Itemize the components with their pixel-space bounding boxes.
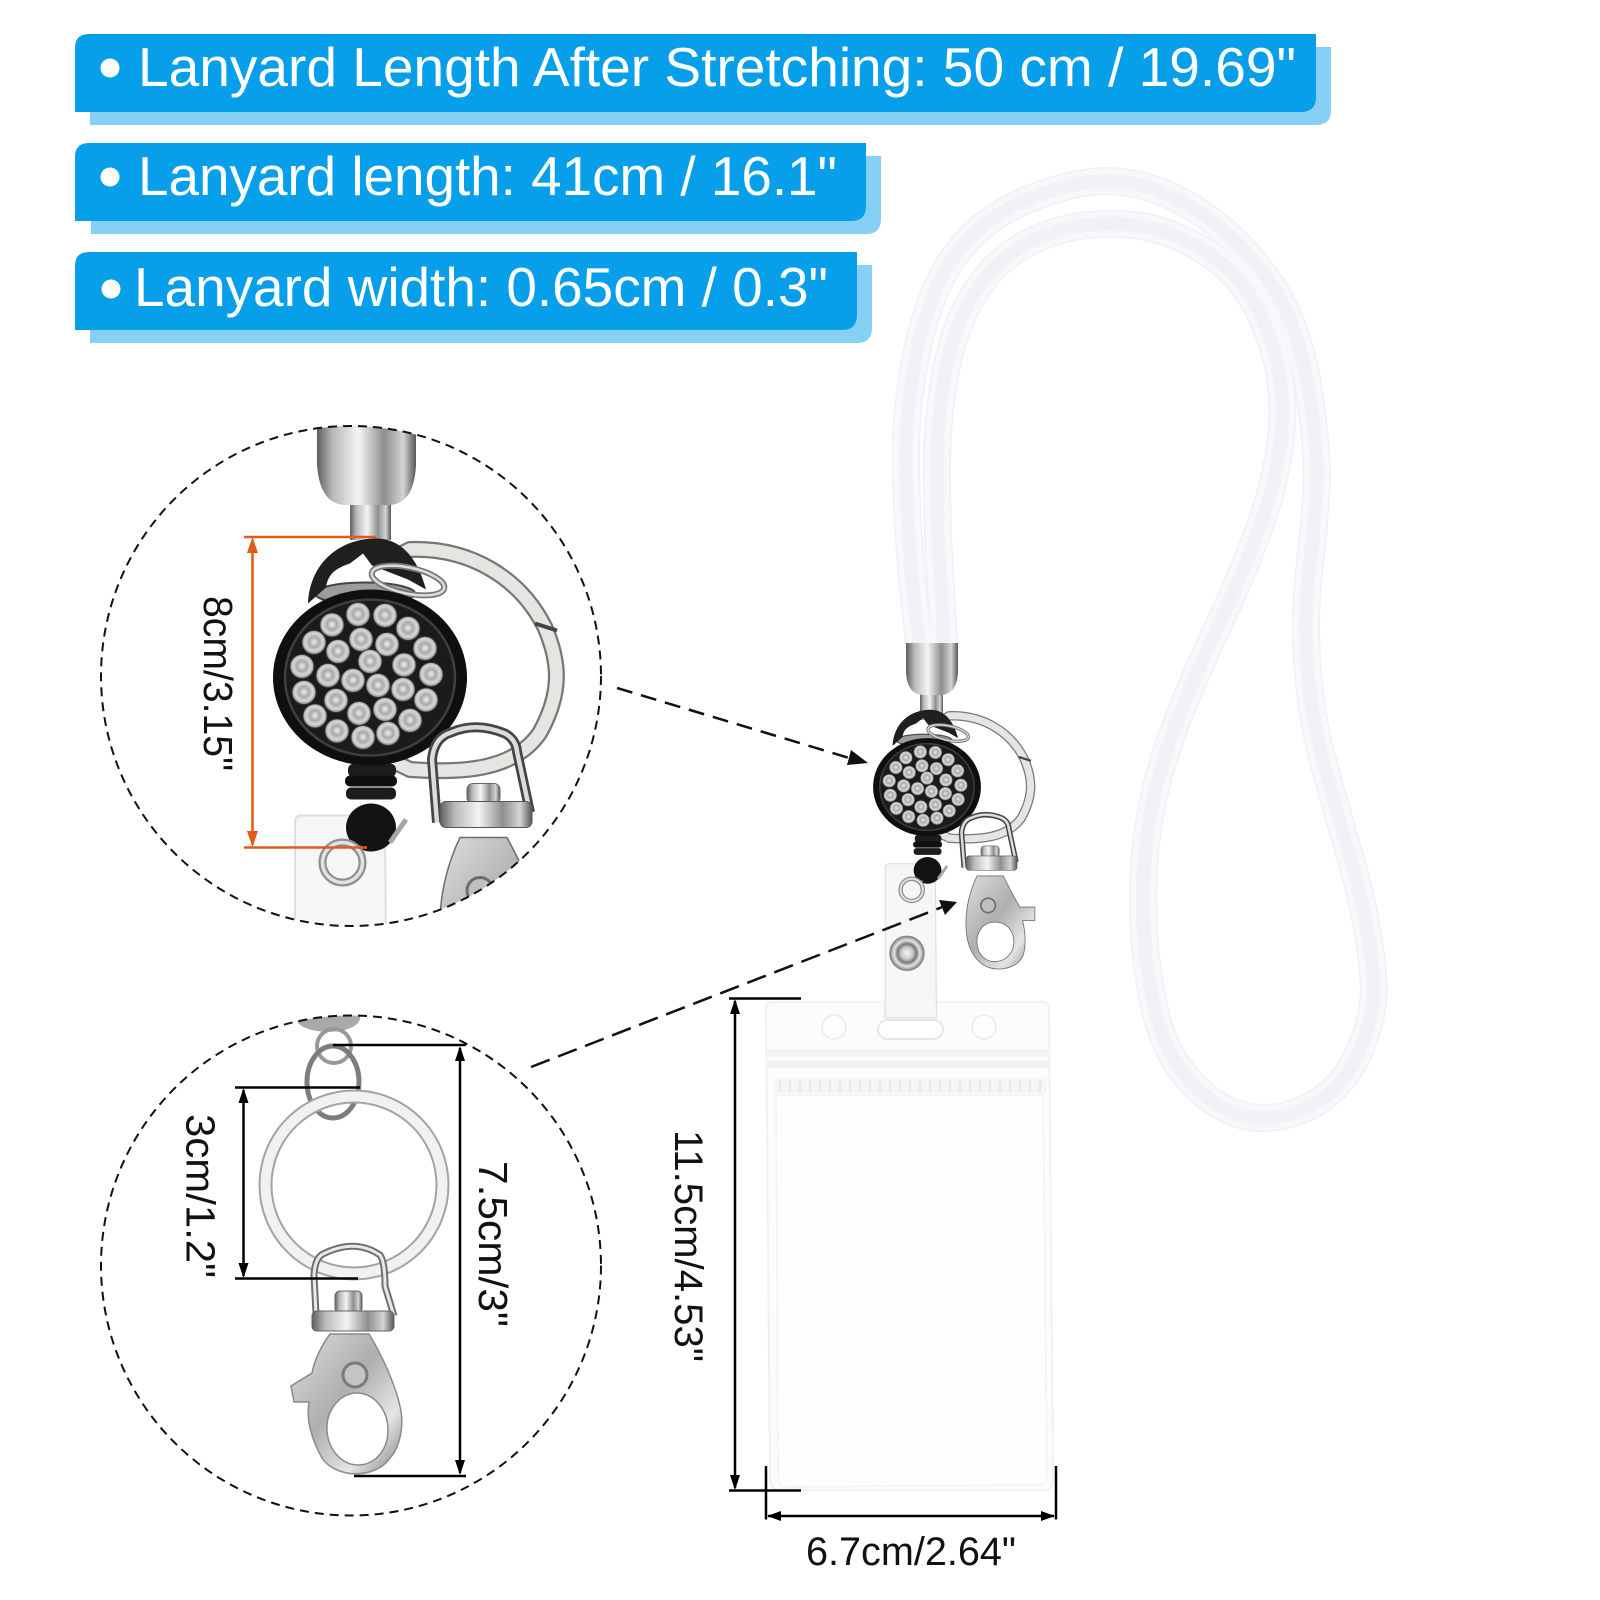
dimension: key ring 3cm: 3cm/1.2" [178, 1114, 224, 1278]
dimension: reel height 8cm: 8cm/3.15" [195, 596, 241, 771]
dimension: pouch height 11.5cm: 11.5cm/4.53" [666, 1130, 710, 1362]
panel: lanyard length [75, 143, 881, 234]
dimension: reel height 8cm [195, 537, 376, 848]
lanyard strap [906, 181, 1374, 1118]
panel: lanyard length after stretching [75, 34, 1331, 125]
dimension: pouch width 6.7cm [766, 1466, 1056, 1574]
dimension: key ring 3cm [178, 1088, 360, 1278]
dimension: clasp assembly 7.5cm [333, 1045, 516, 1476]
dimension: pouch height 11.5cm [666, 998, 801, 1490]
panel: lanyard width [75, 252, 872, 343]
dimension: pouch width 6.7cm: 6.7cm/2.64" [806, 1530, 1016, 1574]
badge holder pouch [766, 1000, 1053, 1490]
detail circle: key ring and clasp [101, 1004, 601, 1516]
dimension: clasp assembly 7.5cm: 7.5cm/3" [470, 1161, 516, 1327]
detail circle: badge reel [100, 425, 602, 927]
panel: lanyard length after stretching: Lanyard Length After Stretching: 50 cm / 19.69" [138, 36, 1296, 98]
small badge reel with clasp on lanyard [873, 643, 1035, 1018]
arrow: reel callout [617, 688, 868, 765]
arrow: clasp callout [531, 900, 957, 1067]
panel: lanyard width: Lanyard width: 0.65cm / 0.3" [134, 256, 828, 318]
panel: lanyard length: Lanyard length: 41cm / 16.1" [138, 145, 837, 207]
